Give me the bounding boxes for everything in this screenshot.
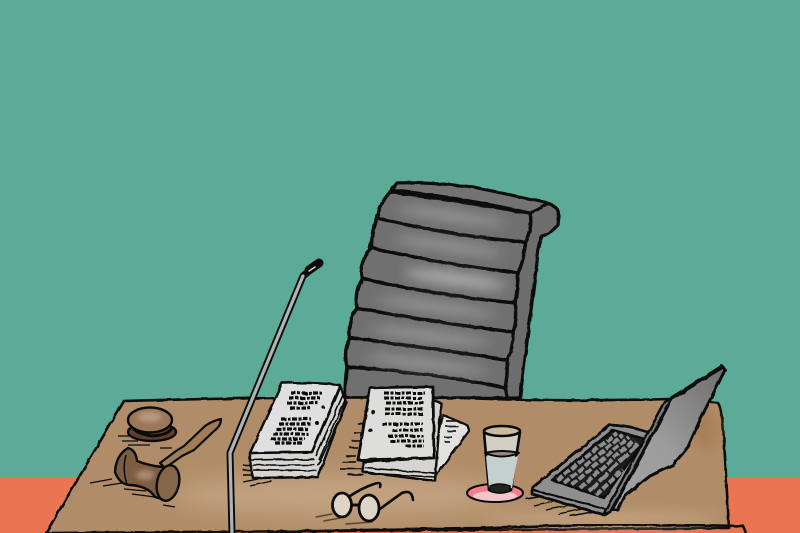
- microphone: [230, 263, 319, 533]
- chair frame: [345, 183, 559, 398]
- gavel head: [115, 448, 178, 500]
- book top page: [250, 383, 340, 453]
- book text blocks: [271, 393, 322, 443]
- book shadow hatch: [243, 465, 272, 486]
- glasses: [316, 483, 413, 524]
- water glass on coaster: [467, 426, 523, 502]
- gavel block: [118, 408, 176, 445]
- front page text: [382, 393, 425, 446]
- glasses shadow: [316, 514, 372, 524]
- office chair: [345, 183, 559, 398]
- glasses temples: [350, 483, 380, 496]
- desk shading: [170, 410, 720, 524]
- glass rim: [484, 426, 520, 436]
- gavel: [90, 419, 221, 507]
- microphone tip: [309, 263, 319, 270]
- open book stack: [243, 383, 346, 486]
- back sheet: [430, 415, 469, 474]
- papers shadow hatch: [340, 424, 366, 475]
- keyboard: [552, 430, 645, 498]
- gavel handle: [160, 419, 221, 468]
- coaster: [467, 484, 523, 502]
- gavel shadow hatch: [90, 448, 175, 507]
- desk top: [46, 397, 729, 533]
- glass base: [490, 484, 510, 493]
- laptop hinge edge: [603, 398, 672, 515]
- laptop screen back: [612, 366, 725, 510]
- glass body: [484, 432, 520, 492]
- laptop base: [532, 425, 648, 515]
- laptop: [526, 366, 725, 516]
- desk front edge: [268, 525, 746, 533]
- chair top edge: [392, 183, 548, 213]
- loose papers: [340, 387, 469, 481]
- water line: [485, 451, 519, 456]
- front page: [358, 387, 434, 460]
- glasses lenses: [332, 493, 352, 517]
- block shadow hatch: [118, 436, 150, 445]
- chair cushion highlights: [364, 203, 508, 377]
- chair cushions: [345, 192, 531, 398]
- book pages: [250, 386, 346, 478]
- desk: [46, 397, 746, 533]
- floor: [0, 477, 800, 533]
- laptop shadow hatch: [526, 496, 592, 516]
- paper stack: [363, 400, 441, 481]
